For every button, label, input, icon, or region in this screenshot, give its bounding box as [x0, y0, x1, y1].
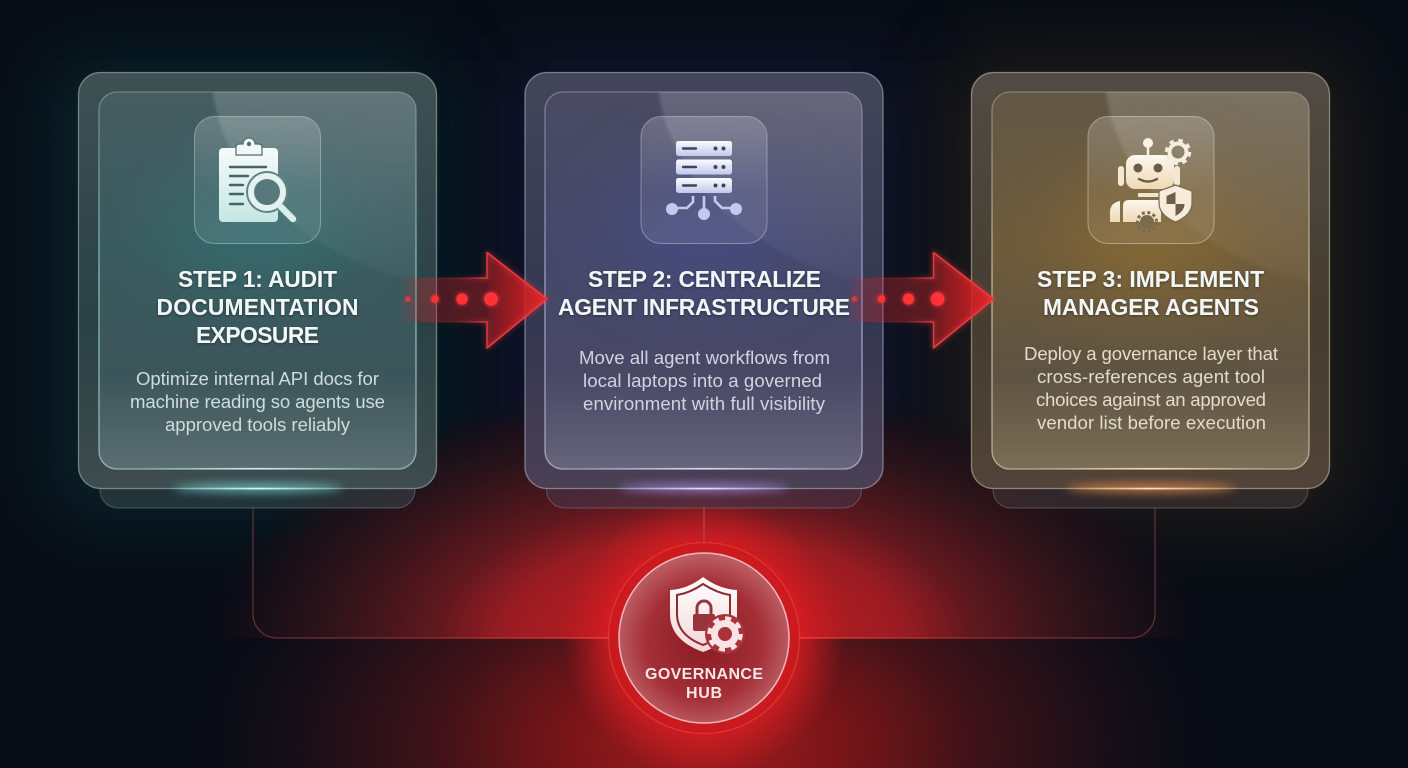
hub label [645, 666, 763, 702]
connector lines to governance hub [253, 508, 1155, 638]
step 1 description [130, 368, 385, 435]
step 3 description: vendor list before execution [1037, 412, 1266, 433]
light streak [138, 468, 378, 493]
step 1 heading: STEP 1: AUDIT [178, 266, 337, 292]
step 1 description: Optimize internal API docs for [136, 368, 379, 389]
hub disc [619, 553, 789, 723]
outer glass layer [972, 72, 1330, 488]
step 1 heading [156, 266, 358, 348]
step 2 description: local laptops into a governed [583, 370, 822, 391]
outer glass layer [525, 72, 883, 488]
governance hub [608, 542, 800, 734]
inner glass panel [99, 85, 425, 469]
hub label: HUB [686, 685, 722, 702]
step 3 heading: MANAGER AGENTS [1043, 294, 1259, 320]
arrow: step 1 to step 2 [400, 252, 547, 348]
step 2 description [579, 347, 830, 414]
step 1 heading: EXPOSURE [196, 322, 319, 348]
step 3 description: choices against an approved [1036, 389, 1266, 410]
step 1 heading: DOCUMENTATION [156, 294, 358, 320]
icon tile [1088, 116, 1214, 244]
icon: server with network nodes [666, 141, 742, 220]
icon: robot with gear and shield [1110, 138, 1192, 232]
step 2 description: Move all agent workflows from [579, 347, 830, 368]
outer glass layer [78, 72, 436, 488]
hub outer ring [608, 542, 800, 734]
step 3 heading [1037, 266, 1264, 320]
step 3 description [1024, 343, 1279, 433]
step 3 description: cross-references agent tool [1037, 366, 1265, 387]
hub label: GOVERNANCE [645, 666, 763, 683]
inner glass panel [545, 85, 871, 469]
icon: shield with lock and gear [670, 577, 745, 654]
back glass layer [993, 470, 1308, 508]
step 1 description: approved tools reliably [165, 414, 351, 435]
arrow: step 2 to step 3 [846, 252, 994, 348]
inner glass panel [992, 85, 1318, 469]
back glass layer [546, 470, 862, 508]
step 2 description: environment with full visibility [583, 393, 826, 414]
step 2 heading [558, 266, 850, 320]
panel: step 3 [972, 72, 1330, 508]
icon tile [641, 116, 767, 244]
step 2 heading: STEP 2: CENTRALIZE [588, 266, 821, 292]
light streak [584, 468, 824, 493]
step 3 description: Deploy a governance layer that [1024, 343, 1279, 364]
step 3 heading: STEP 3: IMPLEMENT [1037, 266, 1264, 292]
step 2 heading: AGENT INFRASTRUCTURE [558, 294, 850, 320]
back glass layer [100, 470, 415, 508]
panel: step 1 [78, 72, 436, 508]
light streak [1031, 468, 1271, 493]
icon: clipboard with magnifier [219, 138, 293, 222]
panel: step 2 [525, 72, 883, 508]
icon tile [194, 116, 320, 244]
step 1 description: machine reading so agents use [130, 391, 385, 412]
